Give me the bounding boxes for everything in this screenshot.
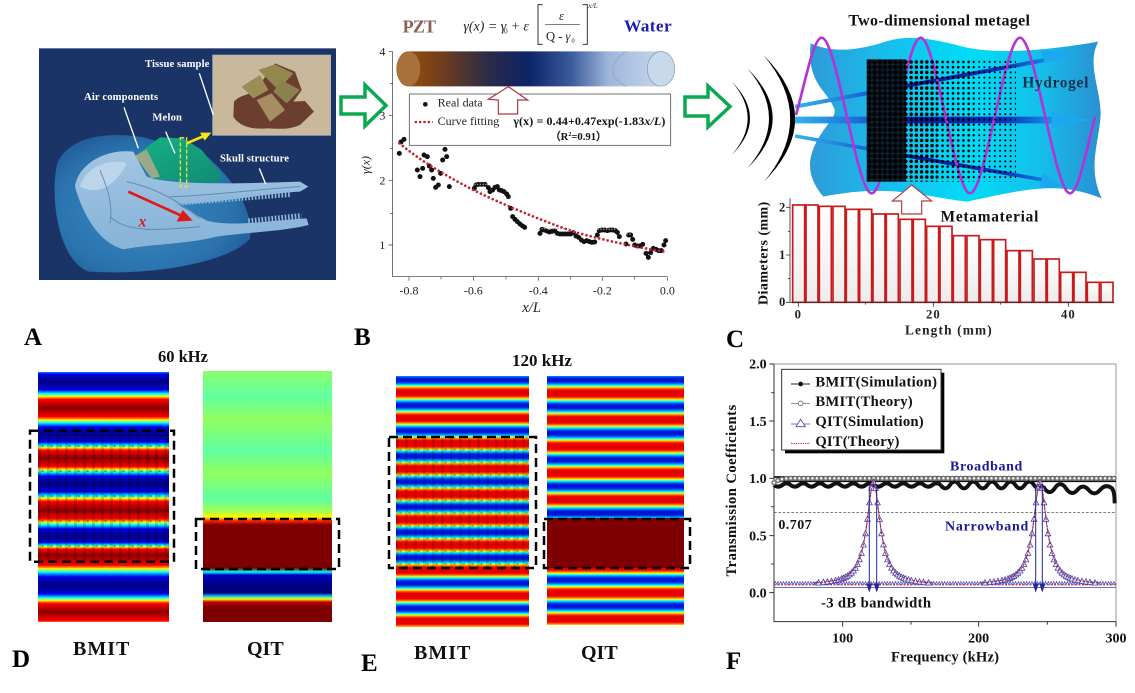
- axis arrow x: [128, 192, 193, 231]
- sound wave arcs: [732, 55, 795, 182]
- legend box: Curve fitting: [438, 114, 499, 128]
- label 0.707: 0.707: [778, 518, 812, 533]
- x axis title: Frequency (kHz): [891, 650, 999, 666]
- hollow arrow: [488, 87, 528, 114]
- label: D QIT: QIT: [247, 638, 284, 660]
- bar chart x title: Length (mm): [905, 322, 992, 337]
- legend box: [782, 369, 944, 453]
- legend box: BMIT(Theory): [815, 394, 913, 410]
- bar chart x labels: 0: [795, 307, 802, 321]
- melon: [135, 137, 223, 184]
- heatmap: E BMIT: [396, 376, 529, 627]
- y tick labels: [749, 358, 767, 601]
- legend box: γ(x) = 0.44+0.47exp(-1.83x/L): [512, 114, 665, 128]
- label: E QIT: QIT: [581, 642, 618, 664]
- y tick labels: 3: [379, 108, 385, 122]
- bar chart y labels: 0: [779, 295, 785, 309]
- title label Water: Water: [624, 17, 672, 36]
- scatter: real data: [399, 139, 666, 257]
- panel label A: A: [24, 324, 42, 351]
- QIT peak at 122 kHz: [814, 482, 934, 583]
- axes: [774, 364, 1116, 622]
- x tick labels: [832, 632, 1126, 647]
- formula: x/L: [587, 1, 598, 10]
- axes: [389, 52, 667, 281]
- legend box: =0.91）: [571, 130, 607, 143]
- y tick labels: 1.0: [749, 472, 767, 487]
- bar chart x labels: [795, 307, 1076, 321]
- hydrogel sheet: [810, 38, 1102, 202]
- 0.707 reference line: [774, 511, 1116, 513]
- heatmap: D QIT: [203, 371, 332, 622]
- QIT flat baseline: [774, 580, 1116, 590]
- x tick labels: -0.2: [593, 284, 612, 298]
- yellow dashed sample box and arrow: [180, 133, 211, 187]
- bar chart y labels: [779, 200, 785, 309]
- panel D heading: 60 kHz: 60 kHz: [158, 347, 208, 366]
- bar chart: diameters: [786, 198, 1114, 307]
- formula: Q -: [546, 30, 563, 44]
- x tick labels: -0.4: [529, 284, 548, 298]
- y tick labels: 2: [379, 173, 385, 187]
- bar chart y labels: 2: [779, 200, 785, 214]
- legend box: [409, 94, 671, 145]
- heatmap: D BMIT: [38, 372, 169, 622]
- y tick labels: 0.5: [749, 529, 767, 544]
- leader lines: [124, 73, 266, 184]
- axis arrow x: x: [138, 214, 147, 231]
- label -3 dB bandwidth: -3 dB bandwidth: [821, 595, 931, 611]
- inset: tissue sample photo: [213, 55, 331, 135]
- wave beams: [795, 56, 1070, 182]
- fitted curve: [399, 143, 665, 252]
- formula: 0: [571, 38, 575, 45]
- sine wave: [796, 38, 1095, 193]
- bar chart x labels: 40: [1061, 307, 1076, 321]
- panel label B: B: [354, 324, 371, 351]
- panel label D: D: [12, 646, 30, 673]
- formula: ε: [523, 20, 529, 35]
- panel label E: E: [361, 650, 378, 677]
- label: Metamaterial: Metamaterial: [941, 209, 1038, 226]
- BMIT theory rings: [774, 478, 1116, 483]
- bandwidth arrows: [867, 484, 1045, 591]
- y tick labels: 0.0: [749, 586, 767, 601]
- QIT peak at 245 kHz: [980, 482, 1100, 583]
- formula: ε: [559, 9, 564, 23]
- label: D BMIT: BMIT: [73, 638, 130, 660]
- legend box: （R: [550, 132, 568, 143]
- y axis title: Transmission Coefficients: [724, 405, 740, 576]
- formula: [463, 1, 598, 45]
- formula: 0: [504, 26, 508, 35]
- label: Tissue sample: Tissue sample: [145, 59, 210, 70]
- y tick labels: 2.0: [749, 358, 767, 373]
- x tick labels: -0.6: [464, 284, 483, 298]
- legend box: QIT(Simulation): [815, 414, 924, 430]
- heatmap: E QIT: [547, 376, 684, 625]
- y axis title: γ(x): [358, 156, 372, 174]
- y tick labels: 4: [379, 45, 385, 59]
- hollow arrow to metamaterial: [892, 185, 932, 214]
- legend box: BMIT(Simulation): [815, 375, 937, 391]
- label: Hydrogel: Hydrogel: [1022, 75, 1088, 92]
- x tick labels: 100: [832, 632, 853, 647]
- legend box: QIT(Theory): [815, 434, 899, 450]
- heading: Two-dimensional metagel: Two-dimensional metagel: [848, 13, 1031, 30]
- skull structure: [75, 151, 309, 249]
- x tick labels: -0.8: [400, 284, 418, 298]
- panel label F: F: [726, 648, 741, 675]
- bar chart y title: Diameters (mm): [757, 201, 772, 305]
- cylinder gradient: [396, 51, 675, 86]
- beam arrowheads: [1040, 50, 1090, 188]
- metamaterial dot array: [867, 59, 1016, 182]
- y tick labels: 1.5: [749, 415, 767, 430]
- panel E heading: 120 kHz: 120 kHz: [512, 351, 572, 370]
- bar chart x labels: 20: [926, 307, 941, 321]
- x tick labels: 300: [1106, 632, 1126, 647]
- formula: γ(x) = γ: [463, 20, 507, 35]
- x axis title: x/L: [521, 300, 541, 316]
- label: E BMIT: BMIT: [414, 642, 471, 664]
- panel label C: C: [726, 326, 744, 353]
- y tick labels: 1: [379, 238, 385, 252]
- BMIT simulation curve: [774, 477, 1116, 503]
- title label PZT: PZT: [403, 16, 436, 36]
- label Narrowband: Narrowband: [945, 519, 1029, 534]
- formula: +: [512, 20, 520, 35]
- label: Skull structure: Skull structure: [220, 154, 289, 165]
- formula: γ: [565, 30, 571, 44]
- label: Melon: Melon: [152, 112, 182, 123]
- x tick labels: [400, 284, 675, 298]
- x tick labels: 200: [968, 632, 989, 647]
- legend box: Real data: [438, 96, 483, 110]
- label Broadband: Broadband: [950, 460, 1023, 475]
- x tick labels: 0.0: [660, 284, 675, 298]
- y tick labels: [379, 45, 385, 252]
- legend box: 2: [568, 132, 571, 138]
- bar chart y labels: 1: [779, 248, 785, 262]
- label: Air components: Air components: [84, 92, 158, 103]
